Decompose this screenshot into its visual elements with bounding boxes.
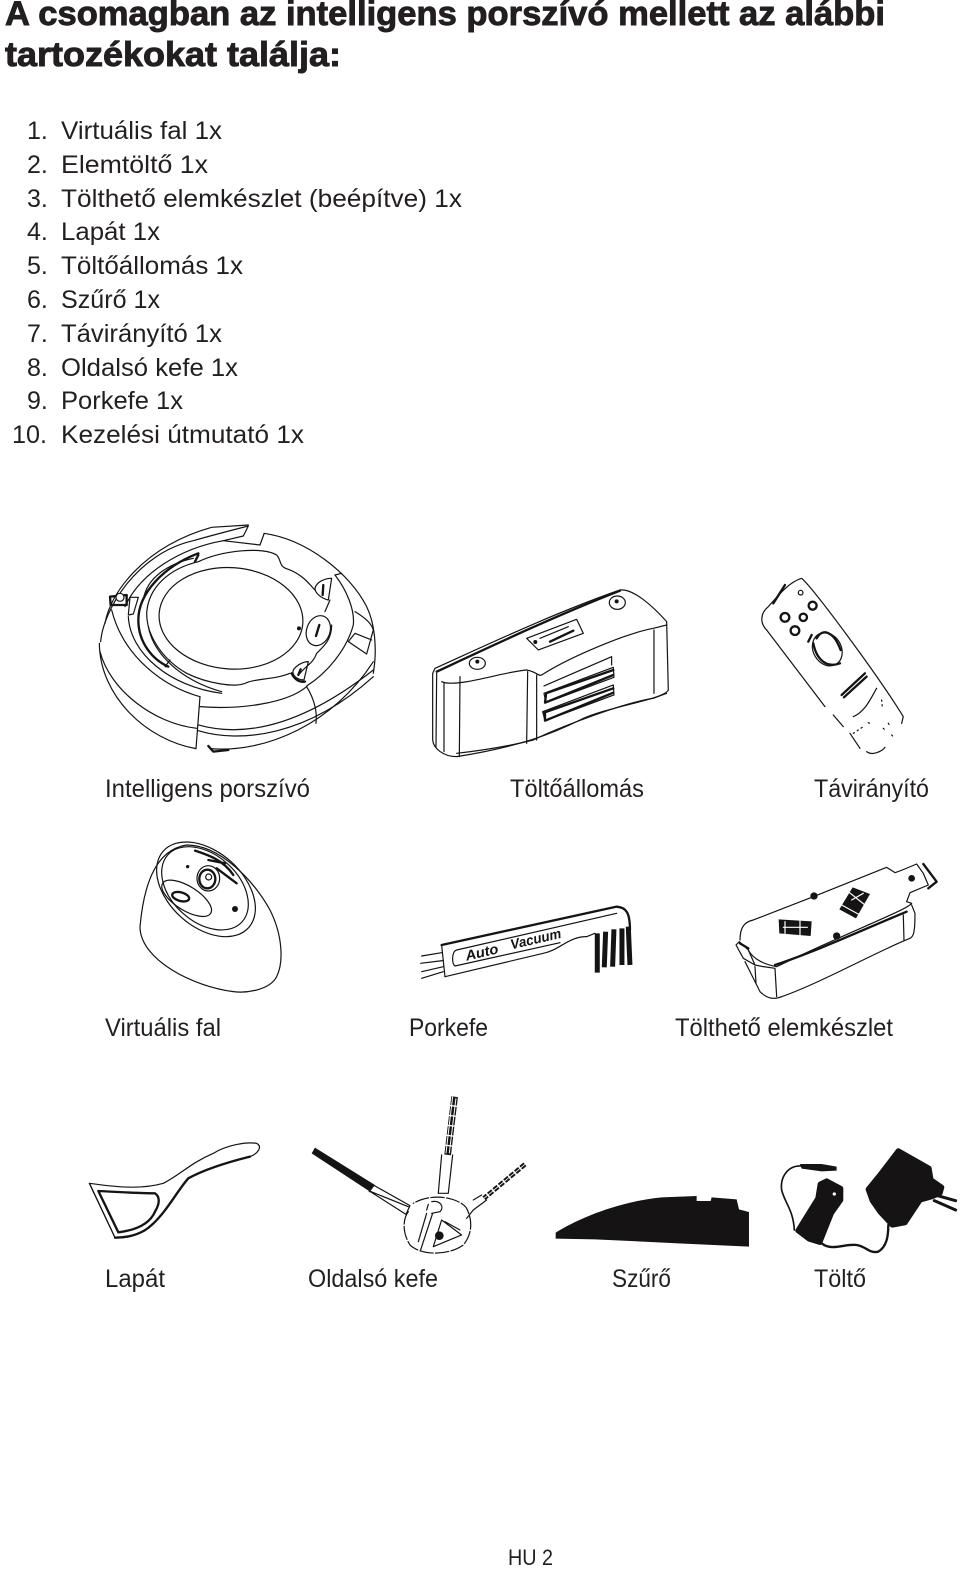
brush label: Vacuum <box>509 925 563 952</box>
labels: second row <box>105 1014 893 1042</box>
numbered accessories list: Kezelési útmutató 1x <box>61 421 305 449</box>
labels: second row: Porkefe <box>409 1014 488 1042</box>
numbered accessories list: Virtuális fal 1x <box>61 117 223 145</box>
icon: cleaning brush <box>421 907 630 978</box>
labels: first row: Töltőállomás <box>510 775 644 803</box>
numbered accessories list: 3. <box>27 185 48 213</box>
icon: virtual wall <box>138 823 281 992</box>
icon: charger <box>781 1151 956 1252</box>
title <box>5 0 885 74</box>
icon: filter <box>556 1196 749 1247</box>
labels: third row: Töltő <box>814 1265 866 1293</box>
numbered accessories list: Tölthető elemkészlet (beépítve) 1x <box>61 185 463 213</box>
numbered accessories list: 10. <box>12 421 47 449</box>
brush label <box>463 925 563 964</box>
page number: HU 2 <box>508 1545 553 1570</box>
labels: third row: Oldalsó kefe <box>308 1265 438 1293</box>
labels: first row <box>105 775 929 803</box>
numbered accessories list: Töltőállomás 1x <box>61 252 244 280</box>
numbered accessories list: 7. <box>27 320 48 348</box>
numbered accessories list: 2. <box>27 151 48 179</box>
numbered accessories list: Lapát 1x <box>61 218 161 246</box>
numbered accessories list <box>12 117 463 449</box>
numbered accessories list: Elemtöltő 1x <box>61 151 209 179</box>
title: tartozékokat találja: <box>5 36 341 74</box>
labels: third row <box>105 1265 866 1293</box>
icon: side brush <box>312 1097 525 1253</box>
labels: third row: Lapát <box>105 1265 165 1293</box>
labels: first row: Intelligens porszívó <box>105 775 310 803</box>
numbered accessories list: 8. <box>27 354 48 382</box>
labels: second row: Virtuális fal <box>105 1014 221 1042</box>
icon: charging station <box>433 590 668 757</box>
numbered accessories list: Szűrő 1x <box>61 286 160 314</box>
icon: rechargeable battery <box>736 864 937 998</box>
labels: second row: Tölthető elemkészlet <box>675 1014 893 1042</box>
labels: third row: Szűrő <box>612 1265 671 1293</box>
numbered accessories list: Porkefe 1x <box>61 387 184 415</box>
brush label: Auto <box>463 940 500 964</box>
icon: scoop <box>89 1143 259 1238</box>
icon: remote control <box>762 578 903 753</box>
numbered accessories list: 6. <box>27 286 48 314</box>
icon: robot vacuum <box>99 525 375 752</box>
numbered accessories list: Távirányító 1x <box>61 320 223 348</box>
numbered accessories list: 5. <box>27 252 48 280</box>
numbered accessories list: 4. <box>27 218 48 246</box>
numbered accessories list: 9. <box>27 387 48 415</box>
numbered accessories list: Oldalsó kefe 1x <box>61 354 238 382</box>
numbered accessories list: 1. <box>27 117 48 145</box>
labels: first row: Távirányító <box>814 775 929 803</box>
